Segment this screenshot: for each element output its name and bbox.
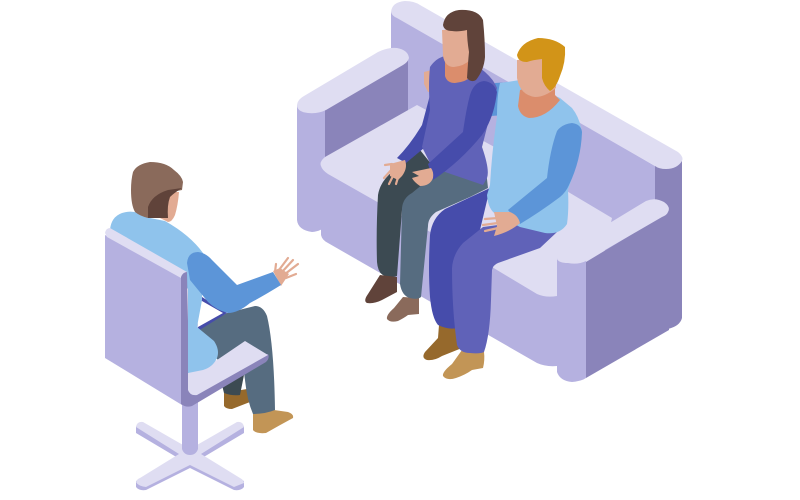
man front shoe — [443, 350, 484, 379]
woman face — [442, 28, 470, 67]
sofa left arm top — [297, 48, 409, 113]
sofa right arm top — [557, 199, 669, 264]
therapist clipboard paper — [195, 301, 223, 327]
woman back shoe — [365, 275, 397, 303]
sofa back face — [391, 12, 655, 300]
sofa seat top — [320, 105, 612, 297]
woman left hand — [384, 160, 406, 184]
woman torso — [422, 56, 497, 185]
woman right hand — [412, 168, 433, 186]
therapist shirt upper — [110, 212, 203, 290]
man back shoe — [423, 325, 462, 360]
sofa right arm outer face — [586, 212, 669, 378]
therapist hair shadow — [148, 188, 182, 218]
woman left arm — [397, 95, 434, 163]
sofa right arm column — [557, 255, 586, 382]
person: therapist legs — [195, 297, 293, 433]
therapist back leg — [222, 375, 244, 395]
person: woman — [365, 10, 512, 322]
therapist clipboard — [196, 297, 227, 331]
man face — [517, 56, 556, 97]
woman front leg — [400, 170, 488, 299]
sofa left arm column — [297, 100, 325, 232]
therapist hand — [273, 258, 298, 286]
therapist upper body — [131, 162, 298, 373]
woman right arm — [428, 81, 497, 180]
sofa back right side — [640, 160, 682, 329]
therapist front leg — [200, 306, 275, 414]
chair back panel — [105, 235, 182, 405]
woman hair — [443, 10, 485, 81]
woman hand on shoulder — [424, 70, 434, 92]
sofa seat front — [321, 150, 600, 366]
sofa — [297, 1, 682, 382]
chair base lower edges — [136, 426, 244, 490]
chair post — [182, 398, 198, 455]
therapist hair — [131, 162, 183, 218]
person: man — [423, 38, 582, 379]
therapist arm — [187, 252, 281, 313]
chair back ridge — [105, 228, 187, 278]
woman back leg — [377, 150, 440, 277]
man neck — [518, 80, 560, 118]
man back leg — [429, 188, 490, 329]
chair seat underside — [181, 272, 269, 407]
man arm behind woman — [491, 82, 512, 116]
therapist shirt lower — [188, 270, 218, 373]
woman neck — [445, 58, 472, 83]
woman front shoe — [387, 297, 419, 322]
sofa back top ridge — [391, 1, 682, 169]
chair seat top — [188, 341, 268, 395]
man hand — [483, 212, 520, 236]
therapist back shoe — [224, 389, 250, 409]
man front leg — [452, 222, 557, 353]
therapist front shoe — [253, 410, 293, 433]
man right arm — [508, 123, 582, 224]
chair base top — [136, 422, 244, 487]
therapist neck and face — [160, 192, 179, 222]
man hair — [517, 38, 565, 91]
man torso — [487, 80, 582, 233]
office chair seat back — [105, 228, 269, 407]
sofa left arm inner face — [325, 60, 408, 200]
office chair base — [136, 398, 244, 490]
